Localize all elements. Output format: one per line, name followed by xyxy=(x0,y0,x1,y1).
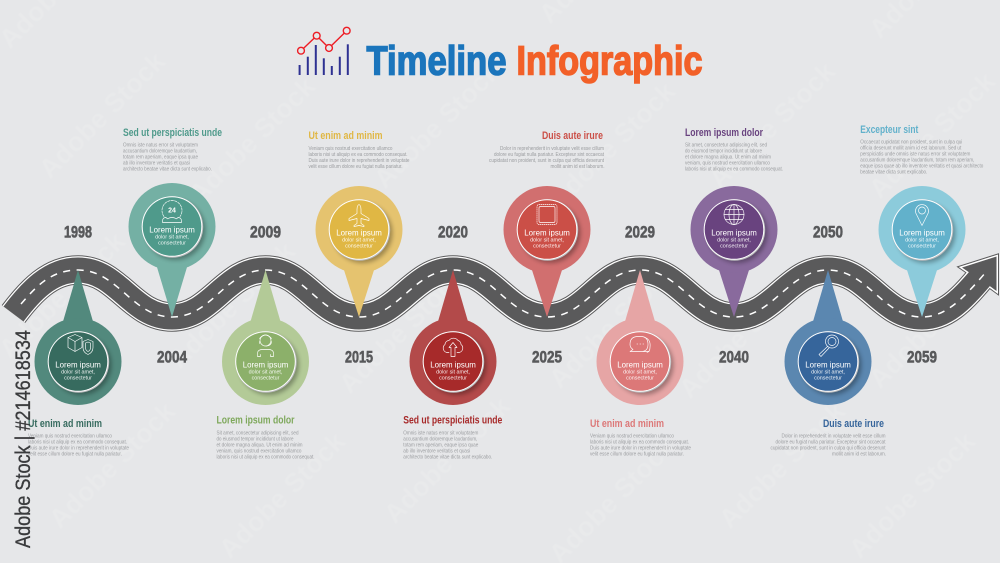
pin: 2015 airplane: consectetur xyxy=(345,244,373,250)
side credit: Adobe Stock id: Adobe Stock | #214618534 xyxy=(12,330,35,548)
text block: Excepteur sint (top): perspiciatis unde omnis iste natus error sit voluptatem xyxy=(860,152,971,158)
text block: Excepteur sint (top): beatae vitae dicta sunt explicabo. xyxy=(860,170,927,176)
pin: 2004 24h phone: Lorem ipsum xyxy=(149,226,195,234)
text block: Lorem ipsum dolor (bottom) xyxy=(216,414,314,461)
year labels: 2050 xyxy=(813,223,843,241)
text block: Lorem ipsum dolor (bottom): veniam, quis nostrud exercitation ullamco xyxy=(216,449,302,455)
stock watermark pattern: Adobe Stock xyxy=(163,236,302,374)
text block: Duis aute irure (bottom): cupidatat non proident, sunt in culpa qui officia deserunt xyxy=(770,446,886,452)
pin: 2015 airplane: dolor sit amet, xyxy=(342,238,376,244)
text block: Ut enim ad minim (bottom right): Veniam quis nostrud exercitation ullamco xyxy=(590,434,674,440)
icon: 24 hour phone xyxy=(162,200,182,222)
text block: Sed ut perspiciatis unde (top): Sed ut perspiciatis unde xyxy=(123,127,222,139)
text block: Sed ut perspiciatis unde (top): totam rem aperiam, eaque ipsa quae xyxy=(123,155,198,161)
text block: Excepteur sint (top): accusantium doloremque laudantium, totam rem aperiam, xyxy=(860,158,975,164)
text block: Sed ut perspiciatis unde (top): ab illo inventore veritatis et quasi xyxy=(123,161,190,167)
stock watermark pattern: Adobe Stock xyxy=(43,396,182,534)
icon: airplane xyxy=(349,204,369,226)
text block: Sed ut perspiciatis unde (top): accusantium doloremque laudantium, xyxy=(123,149,197,155)
text block: Sed ut perspiciatis unde (bottom): architecto beatae vitae dicta sunt explicabo. xyxy=(403,455,492,461)
pin: 2040 globe xyxy=(690,186,778,317)
text block: Ut enim ad minim (bottom left) xyxy=(28,418,129,458)
stock watermark pattern: Adobe Stock xyxy=(843,426,982,563)
text block: Duis aute irure (top): mollit anim id est laborum. xyxy=(550,164,604,170)
text block: Lorem ipsum dolor (bottom): laboris nisi ut aliquip ex ea commodo consequat. xyxy=(216,455,314,461)
title logo: bar chart with red trend line xyxy=(298,27,350,75)
pin: 2009 headset person: Lorem ipsum xyxy=(243,360,289,370)
text block: Lorem ipsum dolor (top): veniam, quis nostrud exercitation ullamco xyxy=(685,161,770,167)
pin: 2009 headset person: dolor sit amet, xyxy=(249,370,283,376)
text block: Lorem ipsum dolor (top): et dolore magna aliqua. Ut enim ad minim xyxy=(685,155,771,161)
text block: Ut enim ad minim (bottom right): Ut enim ad minim xyxy=(590,418,664,430)
text block: Ut enim ad minim (top): velit esse cillum dolore eu fugiat nulla pariatur. xyxy=(308,164,402,170)
text block: Ut enim ad minim (bottom right): laboris nisi ut aliquip ex ea commodo consequat. xyxy=(590,440,689,446)
pin: 2020 cloud upload: dolor sit amet, xyxy=(436,370,470,376)
pin: 2004 24h phone xyxy=(128,183,216,317)
year labels xyxy=(64,223,937,367)
year labels: 2020 xyxy=(438,223,468,241)
icon: cloud upload xyxy=(443,338,463,356)
pin: 2020 cloud upload xyxy=(410,270,496,405)
winding road with arrow xyxy=(14,256,996,317)
text block: Excepteur sint (top): Excepteur sint xyxy=(860,124,919,136)
pin: 1998 box and shield xyxy=(34,270,122,405)
text block: Sed ut perspiciatis unde (bottom): ab illo inventore veritatis et quasi xyxy=(403,449,470,455)
text block: Excepteur sint (top): officia deserunt mollit anim id est laborum. Sed ut xyxy=(860,146,962,152)
pin: 2050 magnifier: consectetur xyxy=(814,376,842,382)
pin: 2050 magnifier: Lorem ipsum xyxy=(805,360,851,370)
icon: microchip xyxy=(537,204,557,224)
pin: 2050 magnifier: dolor sit amet, xyxy=(811,370,845,376)
text block: Sed ut perspiciatis unde (bottom): accusantium doloremque laudantium, xyxy=(403,437,478,443)
year labels: 2029 xyxy=(625,223,655,241)
text block: Excepteur sint (top): Occaecat cupidatat non proident, sunt in culpa qui xyxy=(860,140,962,146)
pin: 1998 box and shield: Lorem ipsum xyxy=(55,360,101,370)
pin: 2040 globe: Lorem ipsum xyxy=(711,228,757,238)
pin: 2029 chat bubbles: dolor sit amet, xyxy=(623,370,657,376)
text block: Duis aute irure (top): Duis aute irure xyxy=(542,130,603,142)
text block: Lorem ipsum dolor (bottom): et dolore magna aliqua. Ut enim ad minim xyxy=(216,443,303,449)
text block: Lorem ipsum dolor (top): Lorem ipsum dolor xyxy=(685,127,764,139)
pin: 2029 chat bubbles: consectetur xyxy=(626,376,654,382)
text block: Sed ut perspiciatis unde (bottom): Omnis iste natus error sit voluptatem xyxy=(403,431,479,437)
text block: Ut enim ad minim (bottom left): velit esse cillum dolore eu fugiat nulla pariatur. xyxy=(28,452,122,458)
pin: 2059 map marker: consectetur xyxy=(908,244,936,250)
text block: Duis aute irure (top): dolore eu fugiat nulla pariatur. Excepteur sint occaecat xyxy=(494,152,604,158)
heading: Timeline Infographic: Timeline xyxy=(366,38,506,84)
icon: box and shield xyxy=(68,334,93,354)
pin: 2015 airplane xyxy=(316,186,402,317)
heading: Timeline Infographic: Infographic xyxy=(516,38,702,84)
pin: 2004 24h phone: dolor sit amet, xyxy=(155,234,189,240)
pin: 2025 microchip xyxy=(504,186,590,317)
stock watermark pattern: Adobe Stock xyxy=(213,426,352,563)
text block: Sed ut perspiciatis unde (bottom) xyxy=(403,414,502,461)
text block: Sed ut perspiciatis unde (bottom): Sed ut perspiciatis unde xyxy=(403,414,502,426)
text block: Duis aute irure (top): Dolor in reprehenderit in voluptate velit esse cillum xyxy=(500,146,604,152)
text block: Sed ut perspiciatis unde (top) xyxy=(123,127,222,173)
icon: globe xyxy=(724,204,744,224)
text block: Ut enim ad minim (bottom left): Duis aute irure dolor in reprehenderit in voluptate xyxy=(28,446,129,452)
pin: 2020 cloud upload: Lorem ipsum xyxy=(430,360,476,370)
text block: Lorem ipsum dolor (top): laboris nisi ut aliquip ex ea commodo consequat. xyxy=(685,167,783,173)
stock watermark pattern: Adobe Stock xyxy=(368,56,507,194)
text block: Duis aute irure (bottom): dolore eu fugiat nulla pariatur. Excepteur sint occaecat xyxy=(776,440,886,446)
pin: 2059 map marker: dolor sit amet, xyxy=(905,238,939,244)
heading: Timeline Infographic xyxy=(366,38,702,84)
pin: 2009 headset person: consectetur xyxy=(252,376,280,382)
text block: Sed ut perspiciatis unde (top): architecto beatae vitae dicta sunt explicabo. xyxy=(123,167,212,173)
year labels: 2025 xyxy=(532,349,562,367)
text block: Ut enim ad minim (top): laboris nisi ut aliquip ex ea commodo consequat. xyxy=(308,152,408,158)
pin: 2025 microchip: dolor sit amet, xyxy=(530,238,564,244)
pin: 2015 airplane: Lorem ipsum xyxy=(336,228,382,238)
pin: 2020 cloud upload: consectetur xyxy=(439,376,467,382)
pin: 2029 chat bubbles xyxy=(596,270,684,405)
pin: 2025 microchip: consectetur xyxy=(533,244,561,250)
text block: Duis aute irure (top): cupidatat non proident, sunt in culpa qui officia deserunt xyxy=(489,158,604,164)
pin: 2040 globe: dolor sit amet, xyxy=(717,238,751,244)
text block: Ut enim ad minim (bottom left): Veniam quis nostrud exercitation ullamco xyxy=(28,434,112,440)
text block: Excepteur sint (top) xyxy=(860,124,983,176)
text block: Lorem ipsum dolor (top) xyxy=(685,127,783,173)
stock watermark pattern: Adobe Stock xyxy=(863,256,1000,394)
stock watermark pattern: Adobe Stock xyxy=(713,396,852,534)
text block: Lorem ipsum dolor (bottom): Lorem ipsum dolor xyxy=(216,414,295,426)
text block: Lorem ipsum dolor (bottom): Sit amet, consectetur adipiscing elit, sed xyxy=(216,431,298,437)
text block: Ut enim ad minim (top): Veniam quis nostrud exercitation ullamco xyxy=(308,146,392,152)
pin: 1998 box and shield: dolor sit amet, xyxy=(61,370,95,376)
stock watermark pattern: Adobe Stock xyxy=(863,66,1000,204)
stock watermark pattern: Adobe Stock xyxy=(673,266,812,404)
pin: 2029 chat bubbles: Lorem ipsum xyxy=(617,360,663,370)
stock watermark pattern: Adobe Stock xyxy=(333,261,472,399)
stock watermark pattern: Adobe Stock xyxy=(703,56,842,194)
text block: Duis aute irure (bottom): mollit anim id est laborum. xyxy=(832,452,886,458)
pin: 2040 globe: consectetur xyxy=(720,244,748,250)
text block: Duis aute irure (bottom): Dolor in reprehenderit in voluptate velit esse cillum xyxy=(782,434,886,440)
year labels: 1998 xyxy=(64,223,92,241)
text block: Ut enim ad minim (bottom left): laboris nisi ut aliquip ex ea commodo consequat. xyxy=(28,440,127,446)
text block: Lorem ipsum dolor (top): Sit amet, consectetur adipiscing elit, sed xyxy=(685,143,767,149)
text block: Ut enim ad minim (top) xyxy=(308,130,410,170)
icon: headset person xyxy=(258,335,274,356)
text block: Ut enim ad minim (top): Duis aute irure dolor in reprehenderit in voluptate xyxy=(308,158,410,164)
pin: 2004 24h phone: consectetur xyxy=(158,240,186,246)
text block: Lorem ipsum dolor (bottom): do eiusmod tempor incididunt ut labore xyxy=(216,437,294,443)
icon: chat bubbles xyxy=(630,336,650,352)
text block: Ut enim ad minim (top): Ut enim ad minim xyxy=(308,130,383,142)
pin: 2004 24h phone: 24 xyxy=(168,208,176,214)
pin: 1998 box and shield: consectetur xyxy=(64,376,92,382)
text block: Ut enim ad minim (bottom right): Duis aute irure dolor in reprehenderit in voluptate xyxy=(590,446,691,452)
icon: map marker xyxy=(916,205,928,226)
year labels: 2015 xyxy=(345,349,373,367)
text block: Ut enim ad minim (bottom left): Ut enim ad minim xyxy=(28,418,102,430)
pin: 2025 microchip: Lorem ipsum xyxy=(524,228,570,238)
stock watermark pattern: Adobe Stock xyxy=(543,256,682,394)
text block: Duis aute irure (bottom): Duis aute irure xyxy=(823,418,884,430)
pin: 2050 magnifier xyxy=(784,270,872,405)
year labels: 2059 xyxy=(907,349,937,367)
stock watermark pattern: Adobe Stock xyxy=(183,71,322,209)
pin: 2009 headset person xyxy=(222,270,309,405)
year labels: 2009 xyxy=(250,223,281,241)
icon: magnifier xyxy=(819,335,838,356)
pin: 2059 map marker: Lorem ipsum xyxy=(899,228,945,238)
text block: Lorem ipsum dolor (top): do eiusmod tempor incididunt ut labore xyxy=(685,149,762,155)
text block: Sed ut perspiciatis unde (top): Omnis iste natus error sit voluptatem xyxy=(123,143,198,149)
year labels: 2004 xyxy=(157,349,188,367)
stock watermark pattern: Adobe Stock xyxy=(543,76,682,214)
text block: Ut enim ad minim (bottom right): velit esse cillum dolore eu fugiat nulla pariatur. xyxy=(590,452,684,458)
year labels: 2040 xyxy=(719,349,749,367)
text block: Ut enim ad minim (bottom right) xyxy=(590,418,691,458)
text block: Duis aute irure (top) xyxy=(489,130,604,170)
stock watermark pattern: Adobe Stock xyxy=(378,391,517,529)
pin: 2059 map marker xyxy=(878,186,966,317)
text block: Sed ut perspiciatis unde (bottom): totam rem aperiam, eaque ipsa quae xyxy=(403,443,478,449)
text block: Duis aute irure (bottom) xyxy=(770,418,886,458)
stock watermark pattern: Adobe Stock xyxy=(33,46,172,184)
